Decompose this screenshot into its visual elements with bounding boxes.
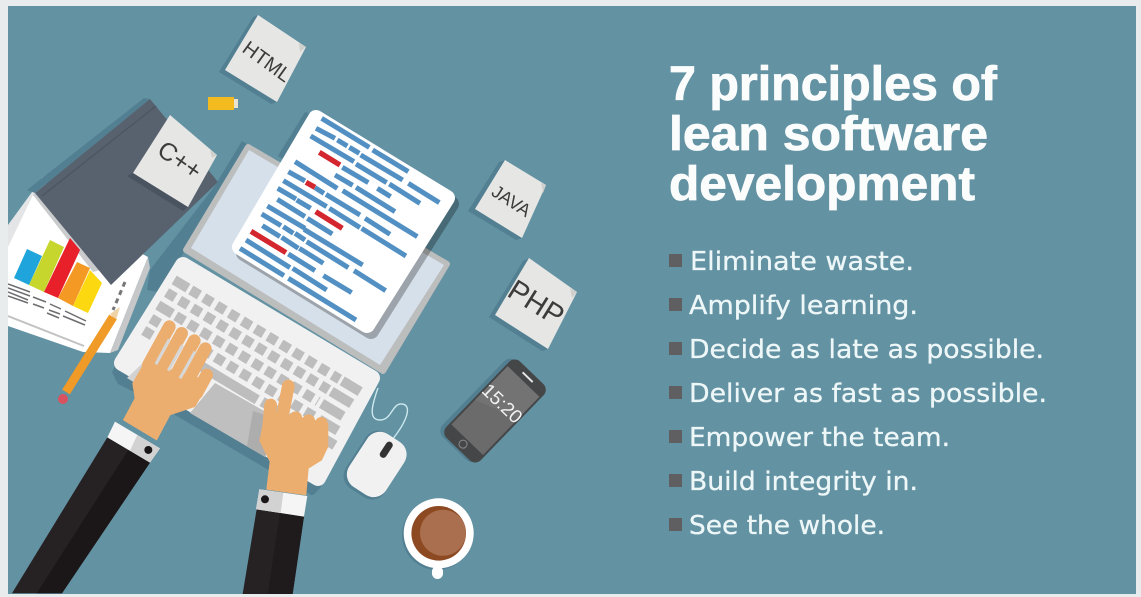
hand shade on keyboard [127,356,162,382]
trackpad [190,383,266,457]
left cuff [107,422,160,463]
principle 5: Empower the team. [689,423,950,453]
laptop screen [186,147,447,371]
bar chart [14,238,102,313]
laptop [112,112,451,492]
laptop base [122,265,372,478]
code lines: red [251,152,342,253]
left sleeve [12,437,150,593]
phone [440,358,546,462]
right hand and sleeve [243,386,328,594]
finger shadows [156,339,195,378]
title: lean software [669,108,988,161]
note: HTML [219,15,306,104]
right cuff [256,489,307,517]
note: PHP: PHP [502,274,570,333]
note: PHP [489,258,577,351]
phone clock: 15:20 [477,380,526,428]
principle 4: Deliver as fast as possible. [689,379,1047,409]
illustration: desk top [8,15,577,594]
keyboard [142,279,365,446]
pencil [58,282,125,404]
left hand [123,327,208,440]
paper text lines [8,284,86,325]
right hand [259,386,328,495]
principle 7: See the whole. [689,511,885,541]
note: C++ [127,115,217,211]
note: JAVA: JAVA [488,181,534,221]
title: 7 principles of [669,58,998,111]
stack of chart papers [8,177,150,353]
note: C++: C++ [152,135,207,185]
principle 2: Amplify learning. [689,291,918,321]
mouse body [344,430,407,500]
coffee cup [402,498,474,579]
principle 6: Build integrity in. [689,467,918,497]
book [27,98,225,292]
principle 3: Decide as late as possible. [689,335,1044,365]
note: JAVA [468,160,546,240]
right sleeve [243,509,304,594]
note: HTML: HTML [238,37,295,87]
left hand and sleeve [12,327,208,593]
principle 1: Eliminate waste. [690,247,914,277]
principles list [669,247,1047,541]
title: development [669,158,975,211]
mouse [344,388,408,500]
mouse cable [372,388,407,440]
icon: USB stick [208,97,238,110]
code lines: blue [240,118,439,320]
code sheet shadows [244,112,451,331]
title [669,58,998,211]
laptop shadow [112,141,318,492]
code sheet [240,118,447,325]
